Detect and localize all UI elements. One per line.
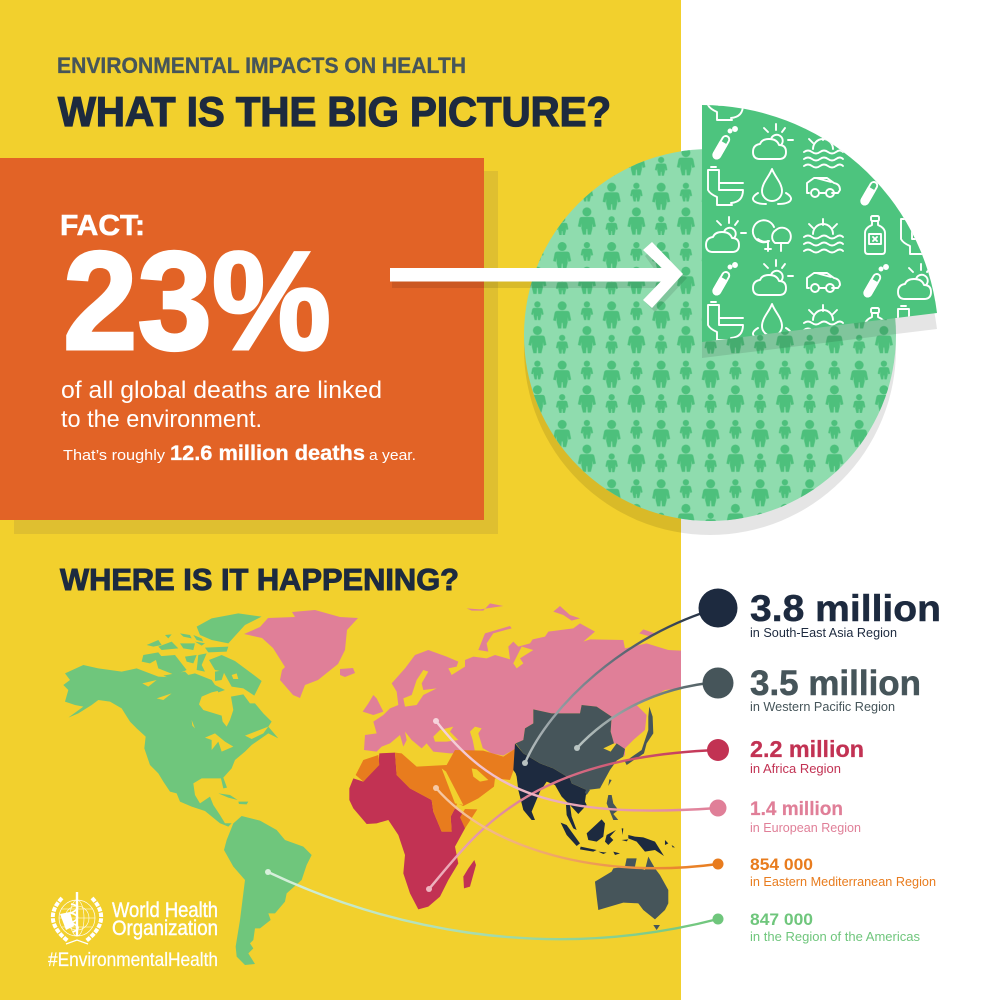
region: South-East Asia xyxy=(513,743,675,856)
region: Western Pacific mainland and Japan xyxy=(516,705,653,790)
stat: Europe 1.4 million: in European Region xyxy=(750,821,861,835)
North America xyxy=(63,613,278,827)
stat: Europe 1.4 million: 1.4 million xyxy=(750,799,843,820)
connector: Europe xyxy=(433,718,718,811)
logo: World Health Organization xyxy=(53,892,218,944)
region: Africa xyxy=(349,753,476,909)
fact description second line: to the environment. xyxy=(61,406,262,433)
title: what is the big picture: WHAT IS THE BIG PICTURE? xyxy=(58,88,611,135)
stat: South-East Asia 3.8 million: in South-East Asia Region xyxy=(750,626,897,640)
WHO name line one: World Health xyxy=(112,899,218,922)
icon: WHO emblem xyxy=(53,892,101,944)
arrow to pie chart xyxy=(390,242,687,312)
region: Americas xyxy=(63,613,312,965)
Iceland xyxy=(340,668,355,677)
Greenland xyxy=(244,610,358,698)
connector: Eastern Mediterranean xyxy=(433,785,718,868)
heading: where is it happening: WHERE IS IT HAPPENING? xyxy=(60,562,459,597)
stat: Africa 2.2 million xyxy=(707,736,864,776)
stat: Western Pacific 3.5 million: in Western Pacific Region xyxy=(750,700,895,714)
Eurasia xyxy=(363,603,682,757)
stat: South-East Asia 3.8 million xyxy=(698,588,941,640)
yellow background panel xyxy=(0,0,681,1000)
heading: environmental impacts on health: ENVIRONMENTAL IMPACTS ON HEALTH xyxy=(57,53,466,78)
stat: Americas 847 000: 847 000 xyxy=(750,911,813,929)
pie wedge with environment icons xyxy=(702,105,937,342)
world map xyxy=(63,603,682,965)
deaths per year: a year. xyxy=(369,447,416,464)
fact description: of all global deaths are linked xyxy=(61,377,382,404)
pie chart: 23 percent of global deaths xyxy=(524,82,938,535)
connector: Americas xyxy=(265,869,718,939)
stat: Americas 847 000: in the Region of the Americas xyxy=(750,930,920,944)
connector: Western Pacific xyxy=(574,682,718,751)
region: Europe xyxy=(244,603,682,757)
deaths per year: 12.6 million deaths xyxy=(170,442,365,465)
big number 23 percent: 23% xyxy=(63,222,331,379)
deaths per year xyxy=(63,442,416,465)
region: Eastern Mediterranean xyxy=(356,748,517,832)
fact label: FACT: xyxy=(60,210,145,242)
region: Western Pacific islands and Australia xyxy=(585,779,668,930)
panel: fact 23 percent xyxy=(0,158,484,520)
stat: Eastern Mediterranean 854 000: 854 000 xyxy=(750,856,813,874)
Red Sea and Persian Gulf xyxy=(442,768,488,805)
deaths per year: That’s roughly xyxy=(63,447,166,464)
North American lakes xyxy=(142,673,268,752)
connector: South-East Asia xyxy=(522,608,718,766)
South America xyxy=(224,816,312,965)
wedge shadow xyxy=(702,121,937,358)
stat: Eastern Mediterranean 854 000 xyxy=(712,856,936,889)
stat: South-East Asia 3.8 million: 3.8 million xyxy=(750,588,941,629)
connector: Africa xyxy=(426,750,718,892)
pie shadow xyxy=(524,163,896,535)
stat: Western Pacific 3.5 million: 3.5 million xyxy=(750,664,921,703)
hashtag: #EnvironmentalHealth xyxy=(48,949,218,971)
stat: Europe 1.4 million xyxy=(710,799,861,835)
pie base with people pattern xyxy=(524,149,896,521)
fact panel shadow xyxy=(14,171,498,534)
stat: Africa 2.2 million: 2.2 million xyxy=(750,736,864,762)
regions: Africa, Eastern Mediterranean, South-East Asia, Australia xyxy=(349,743,675,930)
WHO name line two: Organization xyxy=(112,917,218,940)
stat: Americas 847 000 xyxy=(712,911,920,944)
inland seas xyxy=(403,647,533,752)
stat: Eastern Mediterranean 854 000: in Eastern Mediterranean Region xyxy=(750,875,936,889)
stat: Africa 2.2 million: in Africa Region xyxy=(750,762,841,776)
stat: Western Pacific 3.5 million xyxy=(702,664,921,714)
